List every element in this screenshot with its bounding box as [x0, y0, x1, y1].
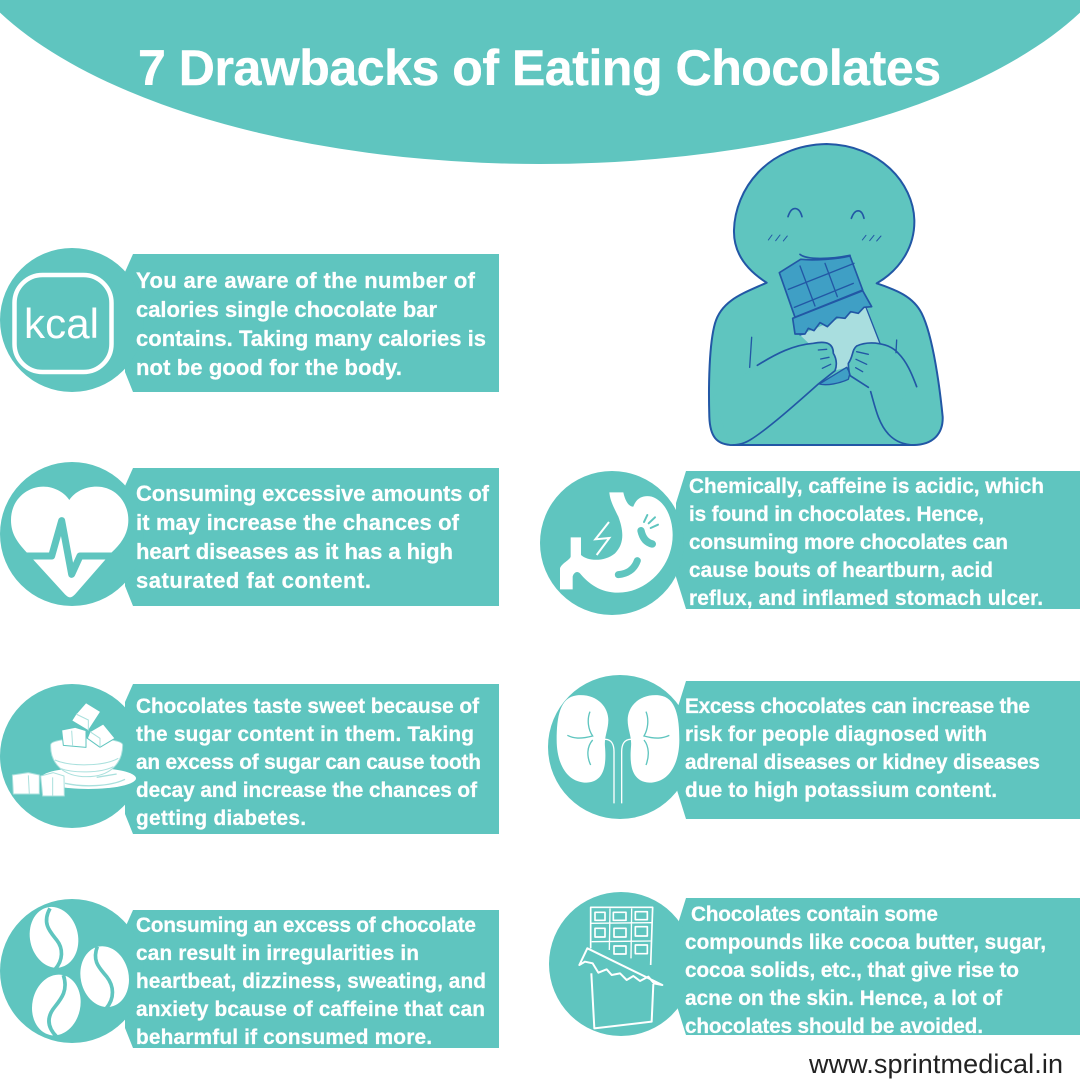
panel: caffeine effects: [0, 899, 499, 1049]
text: heart disease: [136, 481, 490, 593]
text: acne: chocolates should be avoided.: [685, 1015, 983, 1038]
text: sugar: decay and increase the chances of: [136, 779, 477, 802]
text: acidity: [689, 475, 1044, 610]
text: calories: not be good for the body.: [136, 355, 402, 380]
text: acidity: cause bouts of heartburn, acid: [689, 559, 993, 582]
text: sugar: Chocolates taste sweet because of: [136, 695, 479, 718]
text: acne: acne on the skin. Hence, a lot of: [685, 987, 1002, 1010]
icon: heart with pulse: [11, 487, 128, 597]
text: acidity: Chemically, caffeine is acidic, which: [689, 475, 1044, 498]
text: heart disease: Consuming excessive amounts of: [136, 481, 490, 506]
text: calories: contains. Taking many calories is: [136, 326, 486, 351]
icon: kcal: kcal: [24, 300, 99, 347]
panel: acne: [549, 892, 1080, 1038]
text: calories: [136, 268, 486, 380]
text: calories: You are aware of the number of: [136, 268, 476, 293]
text: acne: compounds like cocoa butter, sugar,: [685, 931, 1046, 954]
text: caffeine effects: [136, 914, 486, 1049]
text: acidity: is found in chocolates. Hence,: [689, 503, 984, 526]
illustration: person eating chocolate: [709, 144, 943, 445]
text: kidneys: due to high potassium content.: [685, 779, 997, 802]
title: 7 Drawbacks of Eating Chocolates: [138, 40, 941, 96]
text: acidity: consuming more chocolates can: [689, 531, 1008, 554]
text: caffeine effects: Consuming an excess of chocolate: [136, 914, 476, 937]
icon: coffee beans: [24, 902, 135, 1040]
text: sugar: getting diabetes.: [136, 807, 306, 830]
panel: calories: [0, 248, 499, 392]
text: caffeine effects: can result in irregularities in: [136, 942, 419, 965]
text: acne: Chocolates contain some: [691, 903, 938, 926]
text: kidneys: [685, 695, 1040, 802]
text: acne: cocoa solids, etc., that give rise to: [685, 959, 1019, 982]
icon: kidneys: [557, 695, 679, 803]
text: heart disease: heart diseases as it has a high: [136, 539, 453, 564]
text: acidity: reflux, and inflamed stomach ulcer.: [689, 587, 1043, 610]
icon: sugar bowl: [12, 703, 136, 796]
text: sugar: an excess of sugar can cause tooth: [136, 751, 481, 774]
text: heart disease: saturated fat content.: [136, 568, 371, 593]
icon: kcal: [14, 275, 112, 372]
text: kidneys: adrenal diseases or kidney diseases: [685, 751, 1040, 774]
panel: heart disease: [0, 462, 499, 606]
icon: chocolate bar: [579, 907, 662, 1028]
panel: kidneys: [548, 675, 1080, 819]
text: heart disease: it may increase the chances of: [136, 510, 460, 535]
text: kidneys: risk for people diagnosed with: [685, 723, 987, 746]
text: sugar: [136, 695, 481, 830]
text: kidneys: Excess chocolates can increase the: [685, 695, 1030, 718]
text: caffeine effects: anxiety bcause of caffeine that can: [136, 998, 485, 1021]
icon: stomach: [560, 492, 673, 593]
text: acne: [685, 903, 1046, 1038]
text: sugar: the sugar content in them. Taking: [136, 723, 474, 746]
text: calories: calories single chocolate bar: [136, 297, 437, 322]
footer website: www.sprintmedical.in: [808, 1049, 1063, 1079]
text: caffeine effects: heartbeat, dizziness, sweating, and: [136, 970, 486, 993]
panel: acidity: [540, 471, 1080, 615]
text: caffeine effects: beharmful if consumed more.: [136, 1026, 432, 1049]
panel: sugar: [0, 684, 499, 834]
